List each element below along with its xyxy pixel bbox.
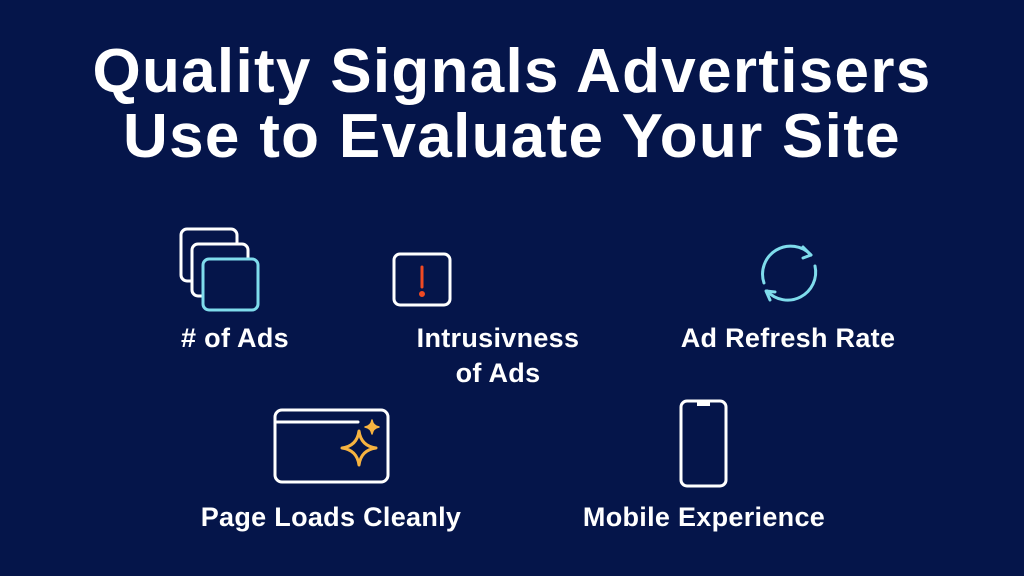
icon: browser with sparkles <box>275 410 388 482</box>
label: Intrusivness of Ads: of Ads <box>456 358 540 388</box>
label: Page Loads Cleanly: Page Loads Cleanly <box>201 502 461 532</box>
icon: ad stack <box>181 229 258 310</box>
title <box>92 37 932 171</box>
title: Use to Evaluate Your Site <box>123 102 901 171</box>
label: Ad Refresh Rate: Ad Refresh Rate <box>681 323 895 353</box>
icon: warning box <box>394 254 450 305</box>
label: Mobile Experience: Mobile Experience <box>583 502 825 532</box>
label: Intrusivness of Ads <box>417 323 579 388</box>
icon: refresh <box>763 246 816 300</box>
title: Quality Signals Advertisers <box>92 37 932 106</box>
label: # of Ads: # of Ads <box>181 323 289 353</box>
label: Intrusivness of Ads: Intrusivness <box>417 323 579 353</box>
icon: phone <box>681 401 726 486</box>
